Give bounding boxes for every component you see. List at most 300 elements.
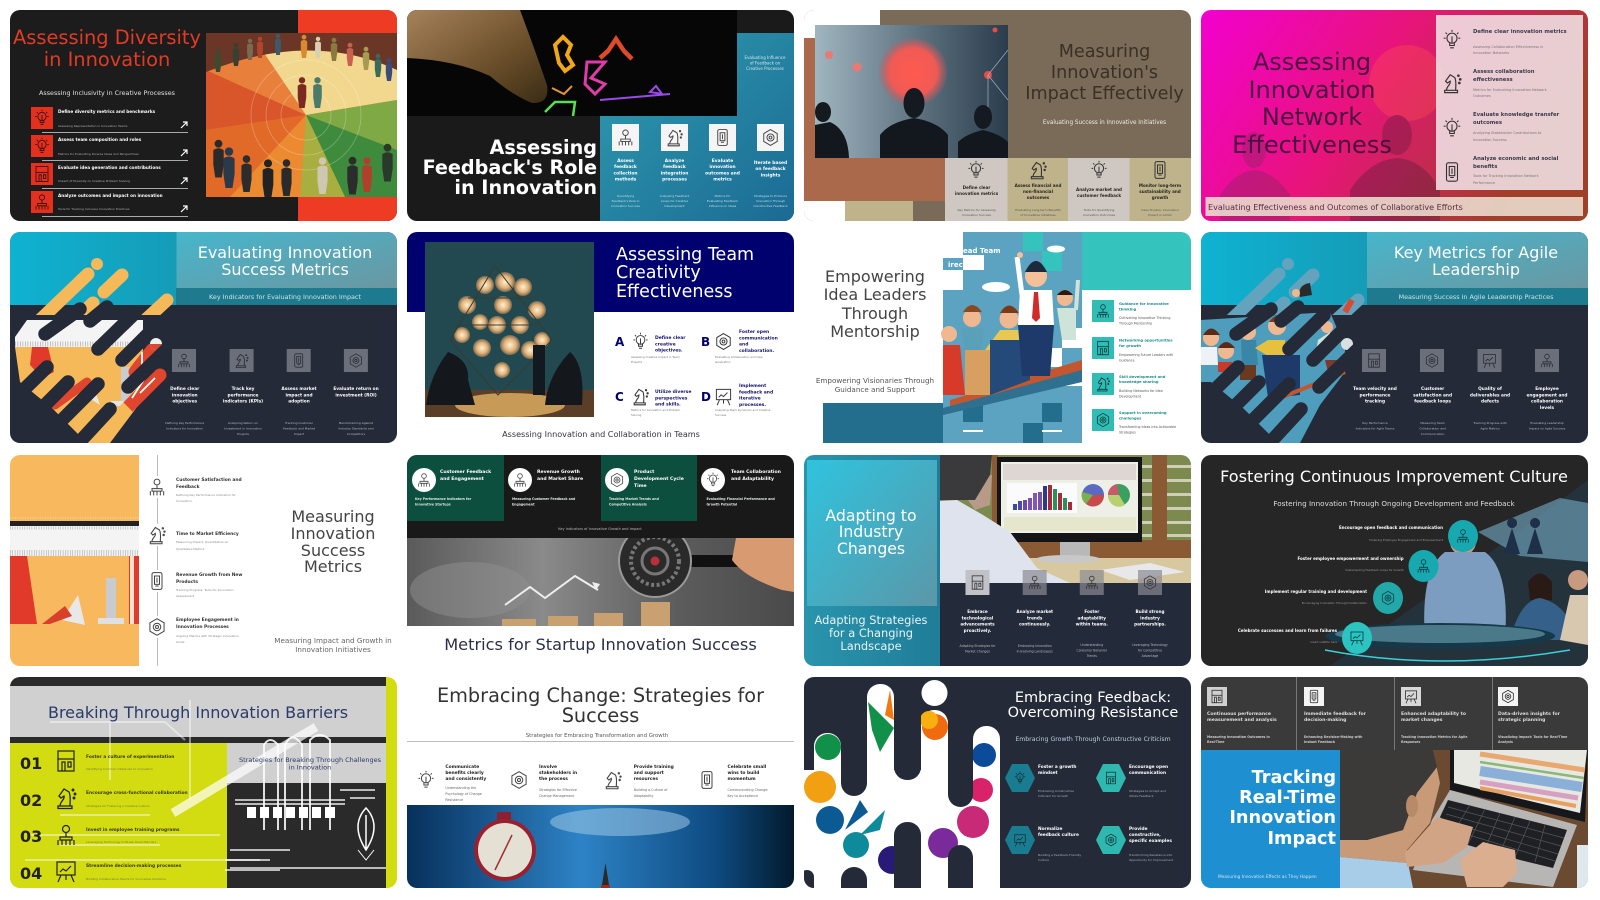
block headings: Time: [634, 483, 647, 489]
teal panel: [600, 33, 794, 221]
column 2: non-financial: [1023, 189, 1054, 194]
slide: Measuring Innovation's Impact Effectively: [804, 10, 1191, 221]
bottom-left colour blocks: [804, 201, 913, 221]
step captions: Building Collaborative Teams for Innovative Solutions: [86, 877, 166, 881]
step headings: Invest in employee training programs: [86, 827, 180, 833]
list panel: Evaluate knowledge transfer: [1473, 112, 1560, 118]
dark lower right: [227, 783, 386, 888]
column captions: Defining Key Performance: [165, 421, 204, 425]
column captions: Communication: [1421, 432, 1445, 436]
column headings: decision-making: [1304, 717, 1346, 723]
column labels: industry: [1140, 615, 1160, 620]
column labels: partnerships.: [1134, 622, 1166, 627]
item headings: iterative: [739, 396, 761, 402]
column captions: Evaluating Leadership: [1530, 421, 1564, 425]
list panel: Metrics for Evaluating Innovation Network: [1473, 88, 1548, 92]
title: Adapting to: [825, 506, 917, 525]
item 2: Foster employee empowerment and ownership: [1297, 556, 1404, 561]
list headings: Revenue Growth from New: [176, 572, 242, 578]
side caption: Evaluating Influence: [745, 55, 786, 60]
block captions: Tracking Market Trends and: [609, 497, 660, 501]
title: Fostering Continuous Improvement Culture: [1220, 467, 1568, 486]
list captions: Defining Key Performance Indicators for: [176, 493, 237, 497]
teal header band: [10, 232, 397, 305]
subtitle: Evaluating Success in Innovative Initiatives: [1043, 120, 1166, 126]
slide: Evaluating Innovation Success Metrics: [5, 232, 397, 447]
subtitle: Guidance and Support: [835, 385, 915, 394]
item 2: [31, 135, 188, 161]
column captions: Feedback and Market: [283, 426, 316, 430]
step icons: [418, 771, 712, 789]
column 1: Key Metrics for Assessing: [957, 208, 996, 212]
photo: people on colour wheel: [206, 33, 397, 198]
title: Success: [301, 541, 365, 560]
list captions: Qualitative Metrics: [176, 547, 205, 551]
column captions: Quantifying: [617, 194, 634, 198]
slide: Assessing Innovation Network Effectiveness: [1201, 10, 1588, 221]
left teal column: [804, 455, 940, 666]
title: in Innovation: [454, 176, 597, 199]
item 3: Implement regular training and development: [1265, 589, 1367, 594]
subtitle: Strategies for Embracing Transformation and Growth: [526, 733, 668, 739]
column captions: Tracking Innovation Metrics for Agile: [1401, 735, 1467, 739]
list captions: Measuring Impact: Quantitative vs.: [176, 540, 229, 544]
gradient background: [1201, 10, 1588, 221]
step headings: the process: [539, 776, 568, 782]
diagonal stripes illustration: [5, 258, 167, 447]
dark lower-left block: [823, 403, 943, 443]
column 4: Monitor long-term: [1139, 183, 1181, 188]
item headings: objectives.: [655, 348, 683, 354]
step captions: Adaptability: [634, 794, 654, 798]
title: Embracing Feedback:: [1015, 690, 1171, 706]
title: Metrics: [304, 557, 362, 576]
column labels: innovation: [172, 392, 198, 398]
column captions: Agile Metrics: [1480, 426, 1500, 430]
icon: tile 3: [709, 124, 736, 151]
top dark stripe: [10, 677, 386, 686]
step headings: Foster a culture of experimentation: [86, 754, 174, 760]
background photo: silhouettes: [1220, 45, 1445, 221]
item headings: feedback and: [739, 389, 773, 395]
slide: Adapting to Industry Changes: [804, 455, 1191, 666]
column captions: Evaluating Feedback: [707, 199, 738, 203]
column labels: proactively.: [964, 628, 992, 633]
column labels: impact and: [285, 392, 313, 398]
step headings: and support: [634, 770, 664, 776]
timeline icons: [146, 476, 168, 638]
step captions: Strategies for Effective: [539, 788, 577, 792]
title: Overcoming Resistance: [1008, 705, 1178, 721]
item headings: Encourage open: [1129, 764, 1168, 770]
item captions: Evaluating Collaboration and Idea: [715, 355, 763, 359]
column labels: Foster: [1084, 609, 1100, 614]
column labels: insights: [761, 172, 781, 178]
subtitle: Key Indicators for Evaluating Innovation Impact: [209, 293, 361, 301]
item captions: Success: [715, 413, 727, 417]
column captions: Collaboration and: [1419, 426, 1446, 430]
subtitle: Empowering Visionaries Through: [816, 376, 934, 385]
step headings: and consistently: [445, 776, 486, 782]
photo: glowing sculpture: [425, 242, 594, 417]
ruler: [10, 518, 139, 556]
cropped banner text: ead Team: [963, 247, 1001, 255]
column captions: Market Changes: [965, 650, 990, 654]
white list panel: Guidance: [1119, 358, 1135, 362]
step captions: Understanding the: [445, 786, 476, 790]
subtitle: Assessing Inclusivity in Creative Processes: [39, 89, 176, 97]
item 1: [31, 107, 188, 133]
item headings: Foster open: [739, 329, 769, 335]
megaphone and tower: [10, 556, 139, 625]
list headings: Customer Satisfaction and: [176, 477, 242, 483]
step captions: Change Management: [539, 794, 575, 798]
item headings: and: [739, 342, 748, 348]
orange illustration panel: [10, 455, 139, 666]
column captions: in Evolving Landscapes: [1017, 650, 1053, 654]
step numbers: 01: [20, 754, 42, 773]
title: Innovation: [291, 524, 375, 543]
slide: Tracking Real-Time Innovation Impact: [1201, 677, 1588, 888]
column captions: Indicators for Innovation: [166, 426, 203, 430]
block headings: Revenue Growth: [537, 469, 580, 475]
step headings: Provide training: [634, 764, 674, 770]
step icons: [57, 751, 76, 882]
column labels: Assess: [617, 158, 634, 164]
column labels: Customer: [1421, 386, 1445, 392]
slide: Key Metrics for Agile Leadership: [1196, 232, 1588, 447]
list panel: Assessing Collaboration Effectiveness in: [1473, 45, 1543, 49]
white windows row: [247, 807, 335, 818]
item 2: Assess team composition and roles: [58, 137, 142, 142]
item headings: mindset: [1038, 770, 1058, 776]
step captions: Identifying Common Obstacles to Innovation: [86, 767, 153, 771]
item headings: constructive,: [1129, 832, 1161, 838]
grey title band: [10, 686, 386, 737]
block headings: Development Cycle: [634, 476, 684, 482]
column captions: Understanding: [1080, 643, 1103, 647]
column headings: market changes: [1401, 717, 1443, 723]
title: Network: [1262, 103, 1362, 131]
list panel: benefits: [1473, 164, 1497, 170]
white list panel: Strategies: [1119, 430, 1136, 434]
grey caption band: [227, 743, 386, 783]
item headings: communication: [739, 335, 778, 341]
white list panel: Transforming Ideas into Actionable: [1118, 425, 1176, 429]
block captions: Innovative Startups: [415, 502, 451, 506]
title: Impact: [1267, 829, 1337, 849]
step headings: wins to build: [728, 770, 759, 776]
step headings: Communicate: [445, 764, 479, 770]
icon: tile 1: [612, 124, 639, 151]
column labels: objectives: [172, 399, 198, 405]
list panel: Tools for Tracking Innovation Network: [1472, 174, 1540, 178]
title: Industry: [839, 522, 903, 541]
lighter title box: [807, 460, 937, 606]
list panel: outcomes: [1473, 120, 1502, 126]
title: Success Metrics: [221, 260, 349, 279]
column labels: satisfaction and: [1413, 392, 1452, 398]
list panel: effectiveness: [1473, 77, 1513, 83]
icon tiles: [172, 349, 368, 372]
column labels: Iterate based: [754, 160, 787, 166]
column headings: strategic planning: [1498, 717, 1545, 723]
white list panel: Empowering Future Leaders with: [1119, 353, 1173, 357]
photo: team around holographic table: [1325, 480, 1588, 666]
column 2: outcomes: [1027, 195, 1050, 200]
subtitle: Measuring Impact and Growth in: [274, 636, 392, 645]
item captions: Projects: [631, 360, 643, 364]
subtitle: Adapting Strategies: [815, 613, 928, 627]
slide: Assessing Feedback's Role in Innovation: [407, 10, 794, 221]
icon tiles: [966, 570, 1162, 595]
subtitle: for a Changing: [829, 626, 913, 640]
item headings: specific examples: [1129, 838, 1172, 844]
title: Key Metrics for Agile: [1394, 243, 1558, 262]
slide: Embracing Change: Strategies for Success: [407, 677, 794, 888]
title: Effectiveness: [616, 282, 732, 302]
subtitle: in Innovation: [289, 764, 331, 772]
title: Assessing Team: [616, 245, 754, 265]
white background: [407, 455, 794, 666]
column captions: Measuring Team: [1420, 421, 1445, 425]
column captions: Benchmarking Against: [339, 421, 374, 425]
subtitle: Innovation Initiatives: [295, 645, 371, 654]
title: Embracing Change: Strategies for: [437, 684, 764, 707]
title: Breaking Through Innovation Barriers: [48, 703, 348, 722]
title: Innovation's: [1051, 63, 1158, 83]
column labels: performance: [228, 392, 259, 398]
colour speech blobs: [804, 690, 996, 874]
letter markers: D: [701, 390, 711, 404]
column labels: indicators (KPIs): [223, 399, 263, 405]
item captions: Analyzing Team Dynamics and Creative: [715, 408, 771, 412]
white background: [407, 677, 794, 888]
item headings: Provide: [1129, 826, 1148, 832]
column labels: methods: [615, 177, 637, 183]
white list panel: for growth: [1119, 344, 1141, 348]
white list panel: Networking opportunities: [1119, 338, 1173, 342]
white shape field: [804, 680, 1000, 888]
column labels: technological: [962, 615, 994, 620]
column labels: adoption: [288, 399, 310, 405]
column captions: Competitors: [347, 432, 366, 436]
column labels: on feedback: [755, 166, 786, 172]
column headings: Immediate feedback for: [1304, 711, 1367, 717]
column captions: Impact on Agile Success: [1529, 426, 1566, 430]
blue title panel: [1201, 750, 1340, 888]
subtitle: Embracing Growth Through Constructive Criticism: [1015, 736, 1171, 743]
title: Changes: [837, 539, 905, 558]
item captions: Metrics for Innovation and Problem: [631, 408, 680, 412]
white list panel: Development: [1119, 394, 1142, 398]
white background: [804, 232, 1191, 443]
footer caption: Assessing Innovation and Collaboration in Teams: [502, 429, 700, 439]
step headings: Involve: [539, 764, 557, 770]
title box: [1367, 232, 1588, 288]
column labels: levels: [1540, 405, 1555, 411]
white list panel: knowledge sharing: [1119, 380, 1159, 384]
icon tiles: [1362, 349, 1559, 372]
column 1: Define clear: [963, 185, 990, 190]
item headings: Implement: [739, 383, 767, 389]
column labels: integration: [661, 170, 688, 176]
item headings: creative: [655, 341, 676, 347]
item headings: Normalize: [1038, 826, 1062, 832]
column captions: Analysis: [1498, 740, 1513, 744]
list panel: Analyzing Stakeholder Contributions to: [1473, 131, 1541, 135]
navy header: [407, 232, 794, 312]
slide: Breaking Through Innovation Barriers: [10, 677, 397, 888]
column 2: of Innovative Initiatives: [1020, 213, 1056, 217]
teal header band: [1201, 232, 1588, 305]
column dividers: [1296, 677, 1493, 750]
column captions: Real-Time: [1207, 740, 1224, 744]
step headings: momentum: [728, 776, 756, 782]
title: Real-Time: [1239, 788, 1336, 808]
slide: Empowering Idea Leaders Through Mentorship: [804, 232, 1191, 443]
title: Impact Effectively: [1025, 84, 1184, 104]
photo: leaders and red sphere: [815, 25, 1008, 158]
column labels: continuously.: [1019, 622, 1051, 627]
white list panel: challenges: [1119, 416, 1142, 420]
item 2: [1297, 550, 1438, 582]
column captions: Metrics for: [715, 194, 731, 198]
list panel: Performance: [1473, 181, 1495, 185]
teal corner block: [1082, 232, 1191, 290]
side caption: Creative Processes: [746, 66, 784, 71]
list panel: Analyze economic and social: [1473, 156, 1559, 162]
item captions: Assessing Creative Impact in Team: [631, 355, 680, 359]
column captions: Innovation Success: [611, 204, 640, 208]
letter markers: A: [615, 335, 625, 349]
title: Assessing Diversity: [13, 26, 201, 49]
column 2: [1008, 158, 1068, 221]
block captions: Engagement: [512, 502, 535, 506]
list headings: Time to Market Efficiency: [176, 531, 239, 537]
list headings: Products: [176, 579, 198, 585]
column labels: Define clear: [170, 386, 200, 392]
vertical timeline: [157, 455, 158, 666]
cropped banner text: irec: [948, 261, 963, 269]
column labels: adaptability: [1078, 615, 1106, 620]
step headings: benefits clearly: [445, 770, 484, 776]
list captions: Innovation: [176, 499, 192, 503]
terracotta block: [804, 38, 945, 201]
column labels: collection: [614, 170, 637, 176]
icon tiles: [1207, 687, 1518, 706]
yellow background: [10, 677, 397, 888]
list panel: Outcomes: [1473, 94, 1491, 98]
caption: Measuring Innovation Effects as They Happen: [1218, 874, 1317, 880]
dark lower panel: [940, 583, 1191, 666]
step headings: Encourage cross-functional collaboration: [86, 790, 188, 796]
column captions: Embracing Innovation: [1018, 644, 1052, 648]
column labels: Team velocity and: [1353, 386, 1397, 392]
block captions: Key Performance Indicators for: [415, 497, 472, 501]
column labels: metrics: [713, 177, 732, 183]
list panel: Innovation Success: [1473, 138, 1507, 142]
title: Assessing: [1253, 48, 1371, 76]
column labels: collaboration: [1531, 399, 1563, 405]
step captions: Psychology of Change: [445, 792, 482, 796]
item 1: Define diversity metrics and benchmarks: [58, 109, 156, 114]
column labels: tracking: [1365, 399, 1385, 405]
column captions: Development: [664, 204, 685, 208]
item 3: [31, 163, 188, 189]
column captions: Projects: [237, 432, 249, 436]
step headings: stakeholders in: [539, 770, 577, 776]
white list panel: Guidance for innovative: [1119, 302, 1169, 306]
letter markers: C: [615, 390, 624, 404]
column captions: Responses: [1401, 740, 1420, 744]
dark capsules: [800, 660, 973, 900]
column labels: advancements: [960, 622, 995, 627]
column captions: Investment in Innovation: [224, 426, 262, 430]
dark header: [407, 455, 794, 538]
white background: [10, 455, 397, 666]
column captions: Analyzing Feedback: [660, 194, 690, 198]
block captions: Measuring Customer Feedback and: [512, 497, 576, 501]
slide: Assessing Team Creativity Effectiveness: [407, 232, 794, 443]
title: Effectiveness: [1232, 131, 1392, 159]
column captions: Impact: [294, 432, 305, 436]
column labels: Analyze market: [1016, 609, 1053, 614]
column 3: customer feedback: [1077, 193, 1121, 198]
column 4: Impact in Action: [1148, 213, 1172, 217]
column captions: Industry Standards and: [338, 426, 374, 430]
item headings: Utilize diverse: [655, 389, 691, 395]
column captions: Loops for Creative: [661, 199, 688, 203]
title: Innovation: [1248, 76, 1376, 104]
column captions: Analyzing Return on: [228, 421, 258, 425]
item 4: Insert subtitle here: [1310, 640, 1337, 644]
column labels: Evaluate: [712, 158, 733, 164]
footer title: Metrics for Startup Innovation Success: [444, 635, 757, 654]
section caption: Key Indicators of Innovative Growth and Impact: [558, 527, 642, 531]
item captions: Culture: [1038, 858, 1049, 862]
column labels: deliverables and: [1470, 392, 1510, 398]
white list panel: Through Mentorship: [1118, 322, 1152, 326]
column 4: sustainability and: [1139, 189, 1181, 194]
column labels: investment (ROI): [335, 392, 377, 398]
list headings: Innovation Processes: [176, 624, 229, 630]
column captions: Constructive Feedback: [753, 204, 788, 208]
line art: building and arrow: [25, 700, 386, 870]
step headings: Celebrate small: [728, 764, 767, 770]
item captions: Criticism for Growth: [1038, 794, 1068, 798]
column captions: Strategies to Enhance: [754, 194, 787, 198]
subtitle: Strategies for Breaking Through Challenges: [239, 756, 382, 764]
column captions: Indicators for Agile Teams: [1356, 426, 1395, 430]
column captions: Trends: [1086, 654, 1097, 658]
white list panel: [1082, 290, 1191, 443]
column labels: Assess market: [281, 386, 317, 392]
column labels: processes: [662, 177, 687, 183]
item captions: Strategies to Accept and: [1129, 789, 1166, 793]
icon: tile 4: [757, 124, 784, 151]
side caption: of Feedback on: [750, 60, 781, 66]
title: Success: [562, 704, 639, 727]
item captions: Transforming Resistance into: [1128, 853, 1173, 857]
dark top band: [1201, 677, 1588, 750]
column captions: Key Performance: [1362, 421, 1388, 425]
dark background: [1201, 232, 1588, 443]
column labels: outcomes and: [705, 170, 740, 176]
item 3: Evaluate idea generation and contributions: [58, 165, 161, 170]
diagonal stripes with cartoon team: [1196, 258, 1358, 447]
column 3: [1068, 158, 1130, 221]
